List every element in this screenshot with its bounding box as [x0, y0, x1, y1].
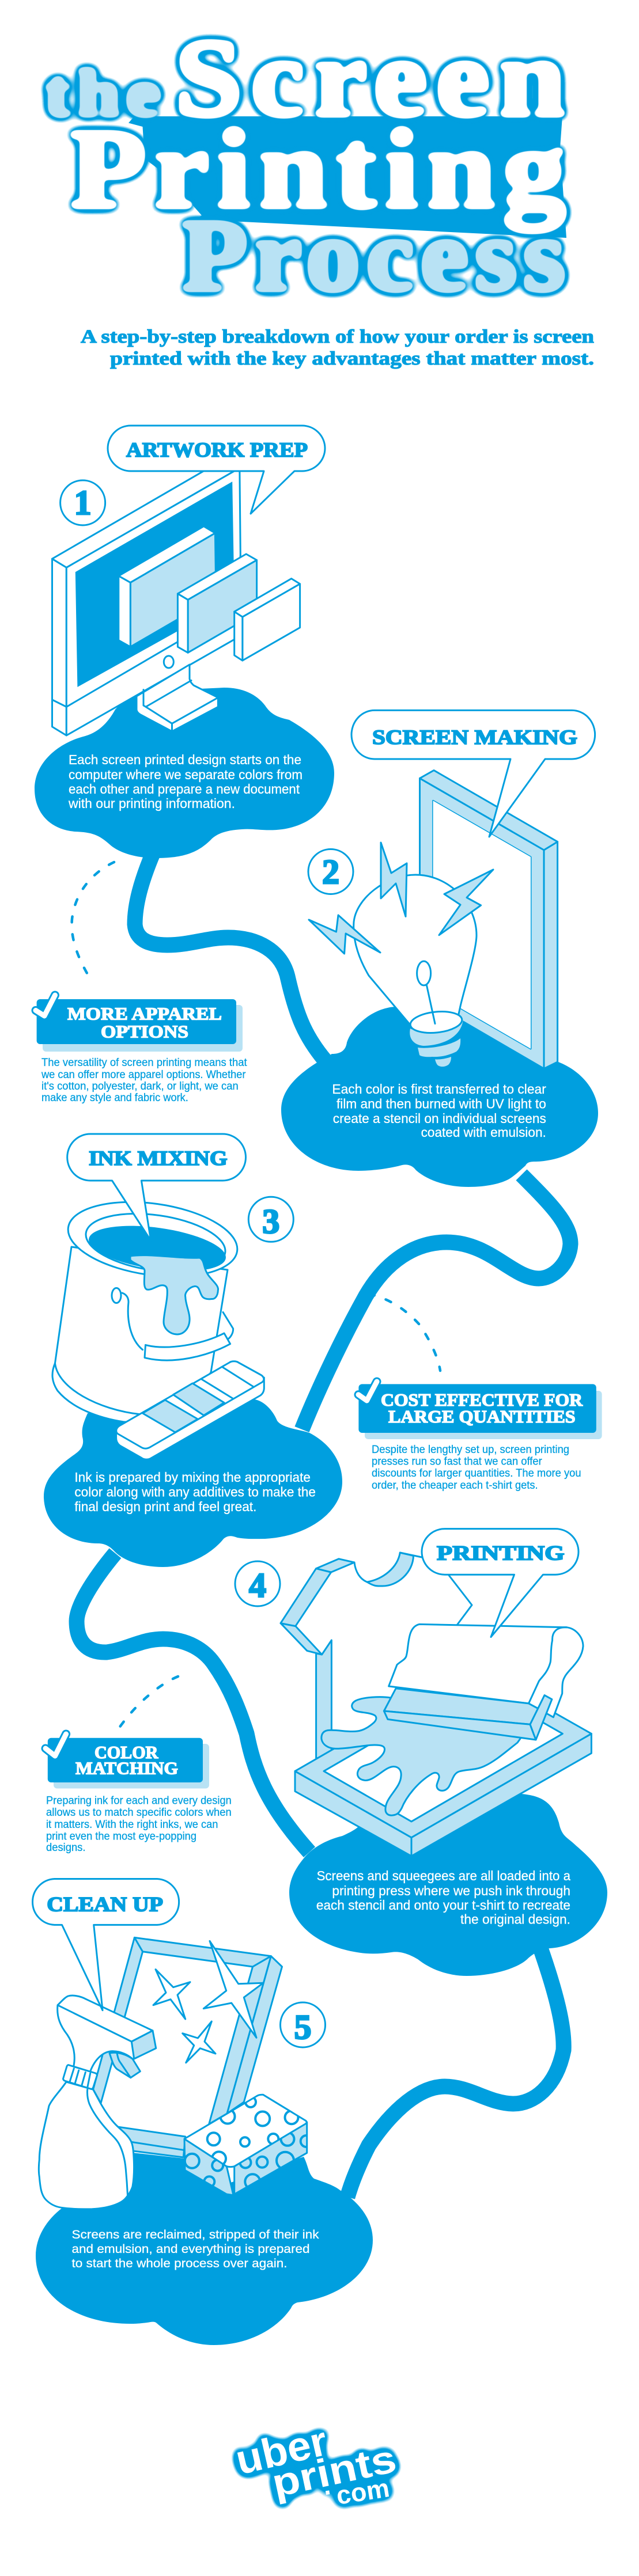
step number 1 — [61, 480, 105, 525]
step number 5: 5 — [294, 2008, 311, 2046]
callout: color matching: designs. — [46, 1841, 85, 1854]
callout: cost effective for large quantities: discounts for larger quantities. The more you — [372, 1467, 581, 1479]
trigger — [58, 2005, 131, 2073]
callout: color matching: Preparing ink for each and every design — [46, 1795, 232, 1807]
step 3 description: Ink is prepared by mixing the appropriate — [74, 1470, 311, 1485]
callout: color matching — [46, 1734, 232, 1854]
callout: more apparel options: The versatility of screen printing means that — [41, 1056, 247, 1069]
step 5 description: to start the whole process over again. — [71, 2256, 287, 2270]
title word: the: the — [45, 56, 160, 130]
logo: uberprints.com: . — [321, 2471, 332, 2501]
callout: cost effective for large quantities: Despite the lengthy set up, screen printing — [372, 1443, 569, 1456]
speech bubble: artwork prep — [108, 426, 325, 514]
callout: color matching: it matters. With the right inks, we can — [46, 1818, 218, 1831]
step number 2 — [308, 849, 353, 894]
title word: Process: Process — [182, 199, 565, 312]
callout: cost effective for large quantities: presses run so fast that we can offer — [372, 1455, 542, 1467]
logo: uberprints.com — [232, 2418, 400, 2512]
step 2 description: Each color is first transferred to clear — [332, 1082, 546, 1097]
dashed connector to color matching — [119, 1676, 178, 1728]
callout: more apparel options: MORE APPAREL — [67, 1004, 222, 1024]
title word: Printing: Printing — [70, 105, 565, 232]
callout: more apparel options: it's cotton, polyester, dark, or light, we can — [41, 1080, 239, 1092]
icon: check mark — [36, 995, 55, 1016]
step number 2: 2 — [322, 853, 339, 891]
step 4 description — [316, 1868, 570, 1927]
callout: cost effective for large quantities — [358, 1382, 602, 1492]
sparkle stars — [153, 1941, 263, 2063]
callout: cost effective for large quantities: COST EFFECTIVE FOR — [381, 1390, 583, 1410]
step 2 description — [332, 1082, 546, 1140]
step number 3: 3 — [262, 1202, 279, 1240]
step number 4: 4 — [249, 1566, 266, 1604]
step 2 description: coated with emulsion. — [421, 1125, 546, 1140]
blob: step 4 description background — [289, 1785, 607, 1976]
subtitle — [81, 327, 594, 369]
icon: ink bucket — [52, 1192, 264, 1459]
step number 3 — [248, 1197, 293, 1242]
step 2 description: film and then burned with UV light to — [336, 1097, 546, 1111]
step 5 description: and emulsion, and everything is prepared — [71, 2242, 310, 2256]
ink drip — [130, 1255, 218, 1334]
speech bubble: clean up: CLEAN UP — [47, 1892, 163, 1915]
title backing block — [128, 116, 566, 238]
title — [45, 17, 566, 312]
speech bubble: printing: PRINTING — [437, 1542, 565, 1565]
callout: more apparel options: OPTIONS — [101, 1021, 188, 1041]
callout: cost effective for large quantities: order, the cheaper each t-shirt gets. — [372, 1479, 538, 1492]
speech bubble: ink mixing — [67, 1134, 245, 1240]
icon: computer monitor — [52, 471, 300, 735]
step 4 description: the original design. — [460, 1912, 570, 1927]
ink splash — [322, 1697, 520, 1815]
blob: step 1 description background — [35, 688, 334, 858]
step number 4 — [235, 1561, 280, 1606]
blob: step 5 description background — [36, 2153, 373, 2345]
callout: color matching: MATCHING — [75, 1758, 178, 1778]
raised frame — [281, 1553, 422, 1758]
step 4 description: Screens and squeegees are all loaded into a — [317, 1868, 570, 1883]
icon: light bulb with uv bolts — [309, 843, 493, 1067]
icon: screen frame — [419, 771, 558, 1069]
step 5 description — [71, 2228, 319, 2270]
bottle body — [39, 2082, 134, 2209]
logo: uberprints.com: prints — [268, 2437, 400, 2506]
callout: more apparel options: we can offer more apparel options. Whether — [41, 1068, 246, 1081]
step 5: clean up — [33, 1879, 373, 2345]
stir stick — [116, 1361, 264, 1459]
step 1 description: Each screen printed design starts on the — [69, 752, 301, 767]
icon: sponge — [184, 2095, 312, 2195]
step 1 description: with our printing information. — [68, 796, 235, 811]
step number 5 — [280, 2002, 325, 2047]
callout: cost effective for large quantities: LARGE QUANTITIES — [388, 1406, 576, 1427]
step 2: screen making — [281, 710, 598, 1187]
callout: color matching: print even the most eye-popping — [46, 1830, 196, 1843]
speech bubble: artwork prep: ARTWORK PREP — [126, 438, 308, 461]
callout: more apparel options — [36, 995, 247, 1104]
bucket handle — [112, 1288, 233, 1360]
press bed — [295, 1668, 591, 1856]
step 5 description: Screens are reclaimed, stripped of their ink — [71, 2228, 319, 2241]
spray head — [58, 1995, 153, 2042]
icon: spray bottle — [39, 1995, 156, 2209]
step 2 description: create a stencil on individual screens — [333, 1111, 546, 1126]
step 3 description: color along with any additives to make the — [74, 1485, 316, 1500]
speech bubble: clean up — [33, 1879, 179, 2010]
paper sheet roll — [389, 1575, 583, 1717]
title word: Screen: Screen — [175, 17, 565, 139]
callout: more apparel options: make any style and fabric work. — [41, 1091, 188, 1104]
connector ribbons between steps — [77, 852, 570, 2197]
blob: step 2 description background — [281, 1007, 598, 1187]
step 1 description: each other and prepare a new document — [69, 781, 300, 796]
step 4 description: each stencil and onto your t-shirt to recreate — [316, 1898, 570, 1913]
logo: uberprints.com: com — [334, 2473, 391, 2510]
dashed connector to more apparel options — [72, 862, 114, 982]
speech bubble: screen making — [351, 710, 595, 837]
step 3 description: final design print and feel great. — [74, 1499, 256, 1514]
icon: screen being cleaned — [93, 1937, 282, 2157]
step 4: printing — [235, 1529, 607, 1976]
callout: color matching: allows us to match specific colors when — [46, 1806, 232, 1819]
speech bubble: ink mixing: INK MIXING — [89, 1147, 228, 1170]
logo: uberprints.com: uber — [232, 2418, 331, 2484]
step 3: ink mixing — [44, 1134, 342, 1567]
speech bubble: printing — [422, 1529, 578, 1637]
icon: check mark — [46, 1734, 66, 1756]
step 3 description — [74, 1470, 316, 1514]
step number 1: 1 — [74, 484, 92, 522]
step 1 description — [68, 752, 303, 811]
dashed connector to cost effective — [369, 1294, 440, 1371]
squeegee — [384, 1689, 552, 1740]
blob: step 3 description background — [44, 1399, 342, 1567]
icon: check mark — [358, 1382, 377, 1401]
callout: color matching: COLOR — [94, 1742, 158, 1762]
spray collar — [63, 2065, 97, 2089]
subtitle: A step-by-step breakdown of how your order is screen — [81, 327, 594, 347]
step 4 description: printing press where we push ink through — [332, 1883, 570, 1898]
step 1 description: computer where we separate colors from — [69, 767, 303, 782]
speech bubble: screen making: SCREEN MAKING — [372, 726, 577, 749]
subtitle: printed with the key advantages that matter most. — [110, 348, 594, 369]
step 1: artwork prep — [35, 426, 334, 858]
icon: printing press — [281, 1553, 591, 1856]
